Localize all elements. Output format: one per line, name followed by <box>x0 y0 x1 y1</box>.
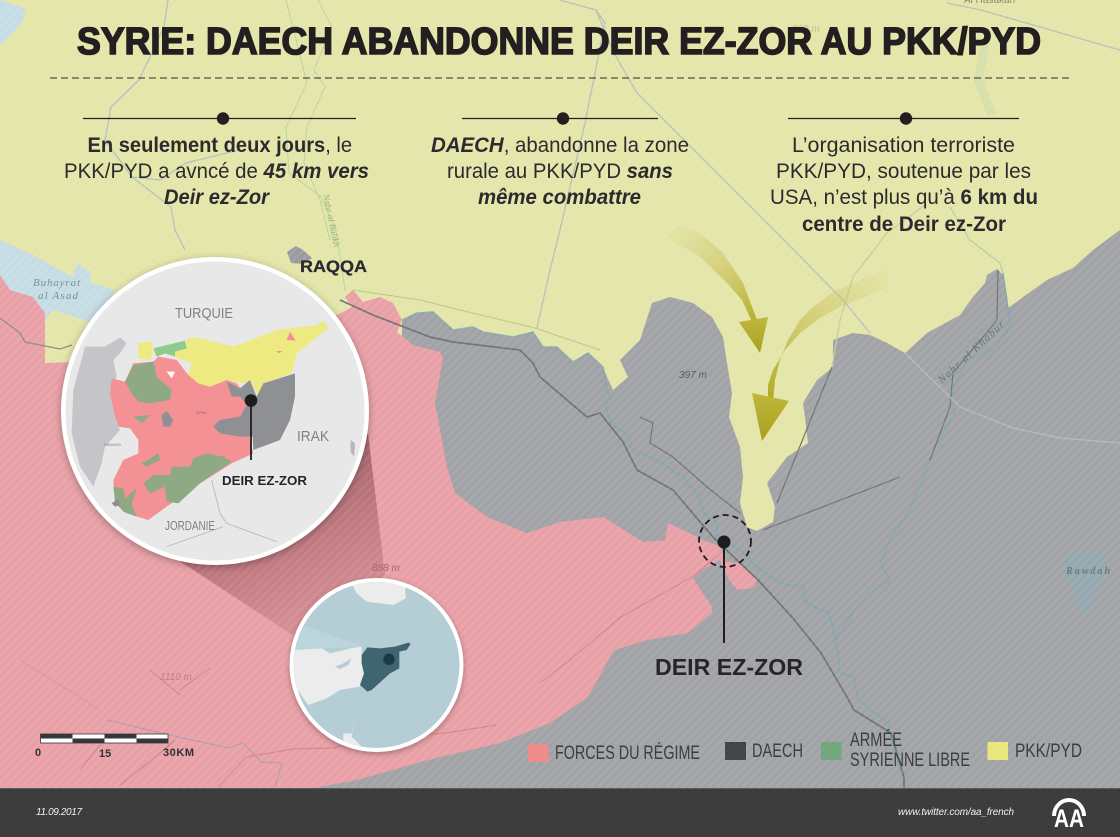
scale bar: 15 <box>99 748 111 760</box>
text block: column 1: Deir ez-Zor <box>164 186 271 209</box>
rivers and lakes <box>286 0 1010 788</box>
locator globe <box>280 570 464 757</box>
label: Raqqa: RAQQA <box>300 257 367 276</box>
inset: country labels <box>104 305 329 533</box>
inset: country labels: JORDANIE <box>165 518 215 533</box>
text block: column 3 <box>770 134 1038 236</box>
yellow pocket near the lake <box>45 310 95 363</box>
map labels: Nahr al Balikh <box>321 192 342 248</box>
legend: Free Syrian Army <box>821 730 970 771</box>
legend: Free Syrian Army: SYRIENNE LIBRE <box>850 750 970 771</box>
arrow: northern advance <box>667 225 768 353</box>
map labels: 1110 m <box>160 672 192 683</box>
legend: Daech: DAECH <box>752 741 803 762</box>
text block: column 2: même combattre <box>478 186 641 209</box>
map labels: 393 m <box>792 24 820 35</box>
inset: opposition areas <box>113 362 232 517</box>
region: Daech grey <box>300 230 1120 790</box>
text block: column 1: En seulement deux jours, le <box>88 134 352 157</box>
scale bar: 30KM <box>163 747 194 759</box>
inset: Daech area <box>112 373 355 507</box>
globe: northern landmass <box>352 582 406 605</box>
map labels: 397 m <box>679 370 707 381</box>
globe: Syria <box>360 643 411 692</box>
inset: PKK/PYD area <box>138 321 328 397</box>
lake: Buhayrat al Asad <box>0 0 115 325</box>
region: regime forces red <box>0 275 758 790</box>
legend: Free Syrian Army: ARMÉE <box>850 730 902 751</box>
text block: column 3: centre de Deir ez-Zor <box>802 213 1006 236</box>
inset: country labels: SYRIA <box>196 411 207 415</box>
Raqqa town <box>287 246 312 264</box>
lake: Rawdah <box>1062 550 1106 617</box>
text block: column 2 <box>431 134 689 209</box>
inset: country labels: IRAK <box>297 428 329 445</box>
legend: PKK/PYD <box>988 741 1082 762</box>
inset: country labels: LEBANON <box>104 443 121 447</box>
roads <box>340 270 998 788</box>
footer: date: 11.09.2017 <box>36 807 82 818</box>
map labels: Nahr al Khabur <box>935 318 1007 387</box>
text block: column 2: rurale au PKK/PYD sans <box>447 160 673 183</box>
map labels: Buhayrat <box>33 277 81 289</box>
column 3 rule with dot <box>788 112 1019 125</box>
inset: borders <box>167 480 277 547</box>
title: SYRIE: DAECH ABANDONNE DEIR EZ-ZOR AU PKK/PYD <box>77 21 1041 63</box>
globe: western landmass <box>287 647 364 705</box>
scale bar: 0 <box>35 747 41 759</box>
text block: column 3: L’organisation terroriste <box>792 134 1015 157</box>
text block: column 2: DAECH, abandonne la zone <box>431 134 689 157</box>
icon: AA logo: AA <box>1054 805 1084 833</box>
inset: Syria control map <box>61 257 369 565</box>
red terrain lines <box>20 550 725 787</box>
shadow cone linking the two circles <box>175 433 385 640</box>
Deir ez-Zor marker <box>699 515 751 643</box>
column 2 rule with dot <box>462 112 658 125</box>
inset: country labels: TURQUIE <box>175 305 233 322</box>
inset: Deir ez-Zor marker <box>222 394 308 488</box>
text block: column 1 <box>64 134 369 209</box>
text block: column 1: PKK/PYD a avncé de 45 km vers <box>64 160 369 183</box>
inset: regime area <box>110 357 253 520</box>
footer bar <box>0 788 1120 837</box>
map labels: al Asad <box>38 290 78 302</box>
legend: Daech <box>725 741 803 762</box>
legend: PKK/PYD: PKK/PYD <box>1015 741 1082 762</box>
inset: Deir ez-Zor marker: DEIR EZ-ZOR <box>222 473 308 488</box>
map labels <box>33 0 1110 683</box>
legend: regime forces: FORCES DU RÉGIME <box>555 743 700 764</box>
label: Deir ez-Zor: DEIR EZ-ZOR <box>655 654 803 680</box>
legend: regime forces <box>528 743 700 764</box>
text block: column 3: PKK/PYD, soutenue par les <box>776 160 1031 183</box>
arrow: eastern advance <box>752 268 888 441</box>
text block: column 3: USA, n’est plus qu’à 6 km du <box>770 186 1038 209</box>
scale bar <box>35 734 194 760</box>
map labels: Rawdah <box>1065 566 1110 577</box>
footer: twitter address: www.twitter.com/aa_french <box>898 807 1014 818</box>
inset: neighbouring coast <box>72 337 127 487</box>
map labels: 858 m <box>372 563 400 574</box>
column 1 rule with dot <box>83 112 356 125</box>
legend <box>528 730 1082 771</box>
